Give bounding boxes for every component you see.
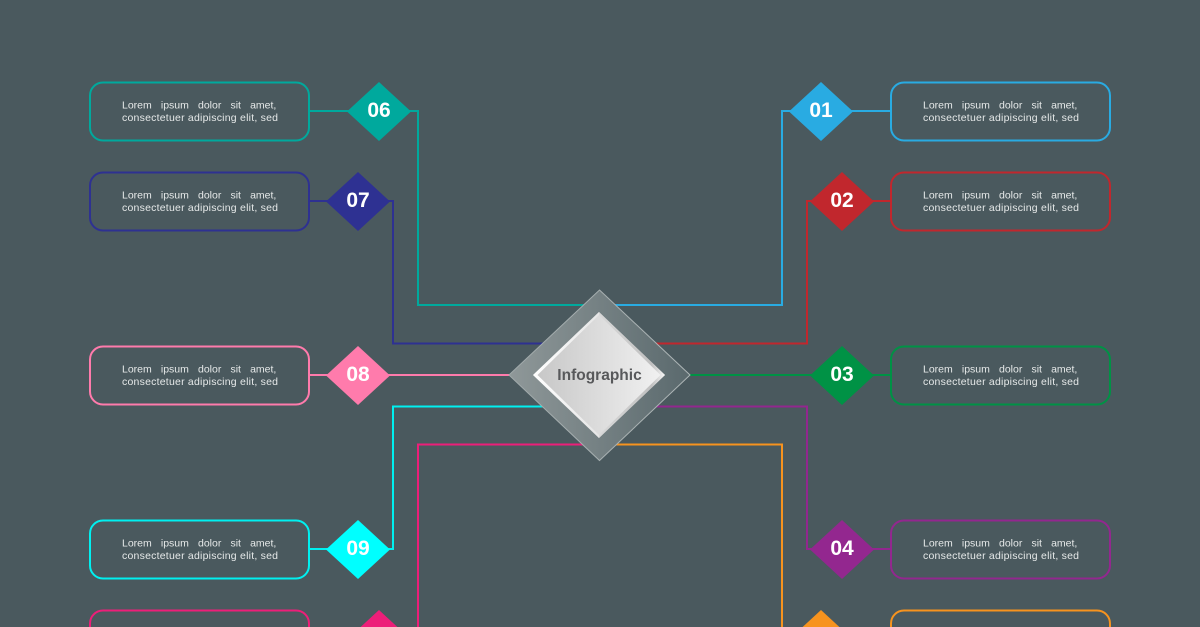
item 02: 02	[830, 189, 854, 212]
item 04: Lorem ipsum dolor sit amet,	[923, 538, 1077, 550]
item 07: consectetuer adipiscing elit, sed	[122, 202, 278, 214]
connector 06	[310, 111, 600, 305]
connector 01	[600, 111, 890, 305]
item 06	[90, 82, 411, 141]
item 07: Lorem ipsum dolor sit amet,	[122, 190, 276, 202]
item 03: consectetuer adipiscing elit, sed	[923, 376, 1079, 388]
item 08: Lorem ipsum dolor sit amet,	[122, 364, 276, 376]
item 02: consectetuer adipiscing elit, sed	[923, 202, 1079, 214]
item 10 (cropped)	[90, 610, 397, 627]
item 02	[810, 172, 1110, 231]
item 07: 07	[346, 189, 370, 212]
item 06: 06	[367, 99, 391, 122]
item 04	[810, 520, 1110, 579]
connector 10	[418, 444, 600, 627]
item 04: consectetuer adipiscing elit, sed	[923, 550, 1079, 562]
item 01	[789, 82, 1110, 141]
item 06: consectetuer adipiscing elit, sed	[122, 112, 278, 124]
item 03: Lorem ipsum dolor sit amet,	[923, 364, 1077, 376]
item 07	[90, 172, 390, 231]
connector 07	[310, 201, 600, 344]
item 02: Lorem ipsum dolor sit amet,	[923, 190, 1077, 202]
central diamond	[509, 290, 690, 460]
item 03: 03	[830, 363, 854, 386]
item 09: Lorem ipsum dolor sit amet,	[122, 538, 276, 550]
item 01: consectetuer adipiscing elit, sed	[923, 112, 1079, 124]
connector 03	[600, 374, 890, 376]
center label: Infographic	[557, 367, 642, 384]
item 04: 04	[830, 537, 854, 560]
item 09: consectetuer adipiscing elit, sed	[122, 550, 278, 562]
item 09: 09	[346, 537, 370, 560]
connector 04	[600, 406, 890, 549]
item 01: Lorem ipsum dolor sit amet,	[923, 100, 1077, 112]
connector 08	[310, 374, 600, 376]
item 08	[90, 346, 390, 405]
item 06: Lorem ipsum dolor sit amet,	[122, 100, 276, 112]
item 08: consectetuer adipiscing elit, sed	[122, 376, 278, 388]
item 05 (cropped)	[803, 610, 1110, 627]
connector 09	[310, 406, 600, 549]
item 09	[90, 520, 390, 579]
connector 02	[600, 201, 890, 344]
item 08: 08	[346, 363, 370, 386]
item 03	[810, 346, 1110, 405]
item 01: 01	[809, 99, 833, 122]
connector 05	[600, 444, 782, 627]
